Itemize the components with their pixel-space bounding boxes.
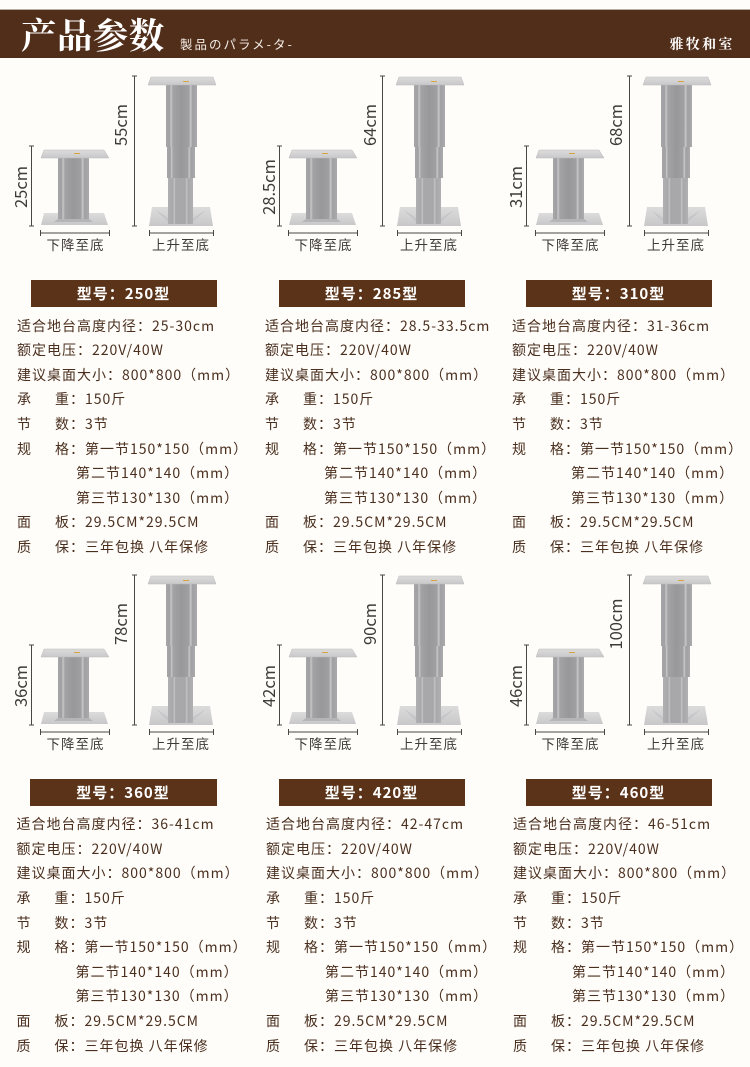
panel: model 460 (503, 574, 744, 1056)
specifications: 重：150斤 (54, 888, 126, 908)
specifications: 板：29.5CM*29.5CM (54, 1011, 199, 1031)
specifications: 数：3节 (54, 913, 108, 933)
specifications (513, 814, 744, 1056)
specifications: 质 (513, 1036, 528, 1056)
specifications: 重：150斤 (55, 389, 126, 409)
specifications: 节 (265, 414, 280, 434)
figure: lowered and raised heights: 78cm (108, 602, 132, 645)
specifications: 格：第一节150*150（mm） (550, 439, 743, 459)
model heading (526, 280, 712, 307)
specifications: 保：三年包换 八年保修 (550, 537, 704, 557)
specifications: 适合地台高度内径：28.5-33.5cm (265, 316, 490, 336)
specifications: 建议桌面大小：800*800（mm） (512, 365, 735, 385)
specifications: 额定电压：220V/40W (512, 340, 659, 360)
specifications: 适合地台高度内径：25-30cm (17, 316, 215, 336)
specifications: 节 (512, 414, 527, 434)
figure: lowered and raised heights (256, 76, 464, 252)
figure: lowered and raised heights: 100cm (603, 598, 627, 649)
specifications: 面 (16, 1011, 32, 1031)
specifications: 板：29.5CM*29.5CM (304, 1011, 449, 1031)
specifications: 第三节130*130（mm） (571, 488, 734, 508)
specifications: 质 (512, 537, 527, 557)
panel: model 360 (8, 574, 248, 1056)
specifications (16, 814, 248, 1056)
figure: lowered and raised heights (8, 574, 216, 750)
specifications: 重：150斤 (304, 888, 375, 908)
panel: model 310 (503, 76, 743, 557)
specifications: 额定电压：220V/40W (17, 340, 164, 360)
specifications: 规 (16, 937, 32, 957)
model heading: 型号：285型 (325, 283, 418, 304)
model heading: 型号：310型 (572, 283, 665, 304)
figure: lowered and raised heights (503, 76, 712, 252)
model heading: 型号：250型 (77, 283, 170, 304)
specifications: 节 (266, 913, 281, 933)
specifications: 额定电压：220V/40W (265, 340, 412, 360)
specifications: 面 (512, 512, 527, 532)
specifications: 规 (513, 937, 528, 957)
specifications: 节 (17, 414, 32, 434)
figure: lowered and raised heights: 42cm (256, 664, 280, 707)
specifications: 数：3节 (303, 414, 357, 434)
specifications: 保：三年包换 八年保修 (551, 1036, 705, 1056)
specifications: 数：3节 (55, 414, 109, 434)
specifications: 节 (16, 913, 32, 933)
model heading: 型号：460型 (572, 782, 665, 802)
header band (0, 9, 750, 58)
specifications: 板：29.5CM*29.5CM (303, 512, 448, 532)
panel: model 285 (256, 76, 496, 557)
specifications: 额定电压：220V/40W (266, 839, 413, 859)
model heading (31, 280, 217, 307)
specifications: 第三节130*130（mm） (76, 986, 239, 1006)
specifications: 数：3节 (551, 913, 605, 933)
specifications: 建议桌面大小：800*800（mm） (16, 863, 240, 883)
specifications: 重：150斤 (303, 389, 374, 409)
specifications: 格：第一节150*150（mm） (304, 937, 497, 957)
specifications (265, 316, 496, 557)
figure: lowered and raised heights: 31cm (503, 166, 527, 208)
specifications: 第三节130*130（mm） (325, 986, 488, 1006)
figure: lowered and raised heights: 64cm (357, 104, 381, 146)
specifications: 规 (265, 439, 280, 459)
figure: lowered and raised heights: 90cm (357, 602, 381, 645)
specifications: 额定电压：220V/40W (513, 839, 660, 859)
specifications: 承 (16, 888, 32, 908)
specifications: 节 (513, 913, 528, 933)
subtitle: 製品のパラメ-タ- (180, 34, 294, 53)
specifications: 额定电压：220V/40W (16, 839, 163, 859)
specifications: 保：三年包换 八年保修 (303, 537, 457, 557)
specifications: 建议桌面大小：800*800（mm） (513, 863, 736, 883)
specifications: 规 (17, 439, 32, 459)
specifications: 建议桌面大小：800*800（mm） (266, 863, 489, 883)
specifications: 第三节130*130（mm） (324, 488, 487, 508)
specifications: 保：三年包换 八年保修 (54, 1036, 209, 1056)
specifications: 重：150斤 (551, 888, 622, 908)
panel: model 250 (8, 76, 248, 557)
specifications: 第三节130*130（mm） (572, 986, 735, 1006)
specifications: 面 (17, 512, 32, 532)
figure: lowered and raised heights: 28.5cm (256, 159, 280, 215)
figure: lowered and raised heights: 55cm (108, 104, 132, 146)
specifications: 适合地台高度内径：36-41cm (16, 814, 215, 834)
specifications: 面 (513, 1011, 528, 1031)
specifications: 承 (513, 888, 528, 908)
figure: lowered and raised heights: 46cm (503, 664, 527, 707)
specifications: 第二节140*140（mm） (572, 962, 735, 982)
specifications: 面 (266, 1011, 281, 1031)
specifications: 第二节140*140（mm） (324, 463, 487, 483)
specifications: 规 (266, 937, 281, 957)
model heading (526, 778, 712, 806)
specifications: 第三节130*130（mm） (76, 488, 239, 508)
specifications: 第二节140*140（mm） (325, 962, 488, 982)
specifications: 第二节140*140（mm） (76, 463, 239, 483)
model heading (279, 280, 465, 307)
model heading: 型号：420型 (325, 782, 418, 802)
model heading (30, 778, 217, 806)
figure: lowered and raised heights: 36cm (8, 664, 32, 707)
figure: lowered and raised heights: 25cm (8, 166, 32, 208)
specifications (266, 814, 497, 1056)
specifications: 格：第一节150*150（mm） (54, 937, 248, 957)
specifications: 重：150斤 (550, 389, 621, 409)
specifications: 建议桌面大小：800*800（mm） (265, 365, 488, 385)
specifications (512, 316, 743, 557)
specifications: 数：3节 (304, 913, 358, 933)
figure: lowered and raised heights (256, 574, 464, 750)
specifications: 规 (512, 439, 527, 459)
specifications: 适合地台高度内径：46-51cm (513, 814, 711, 834)
specifications: 保：三年包换 八年保修 (304, 1036, 458, 1056)
specifications: 面 (265, 512, 280, 532)
figure: lowered and raised heights (8, 76, 216, 252)
specifications: 第二节140*140（mm） (571, 463, 734, 483)
title: 产品参数 (21, 8, 165, 59)
specifications: 适合地台高度内径：31-36cm (512, 316, 710, 336)
panel: model 420 (256, 574, 497, 1056)
figure: lowered and raised heights (503, 574, 712, 750)
specifications: 承 (266, 888, 281, 908)
specifications: 板：29.5CM*29.5CM (55, 512, 200, 532)
figure: lowered and raised heights: 68cm (603, 104, 627, 146)
specifications: 质 (16, 1036, 32, 1056)
specifications: 数：3节 (550, 414, 604, 434)
specifications: 保：三年包换 八年保修 (55, 537, 209, 557)
specifications: 适合地台高度内径：42-47cm (266, 814, 464, 834)
specifications: 格：第一节150*150（mm） (551, 937, 744, 957)
specifications: 质 (17, 537, 32, 557)
specifications: 承 (265, 389, 280, 409)
specifications (17, 316, 248, 557)
specifications: 承 (512, 389, 527, 409)
brand name: 雅牧和室 (670, 34, 735, 54)
specifications: 板：29.5CM*29.5CM (550, 512, 695, 532)
specifications: 建议桌面大小：800*800（mm） (17, 365, 240, 385)
model heading: 型号：360型 (76, 782, 170, 802)
specifications: 质 (265, 537, 280, 557)
specifications: 质 (266, 1036, 281, 1056)
specifications: 第二节140*140（mm） (76, 962, 239, 982)
specifications: 格：第一节150*150（mm） (303, 439, 496, 459)
specifications: 格：第一节150*150（mm） (55, 439, 248, 459)
specifications: 板：29.5CM*29.5CM (551, 1011, 696, 1031)
model heading (279, 778, 465, 806)
specifications: 承 (17, 389, 32, 409)
